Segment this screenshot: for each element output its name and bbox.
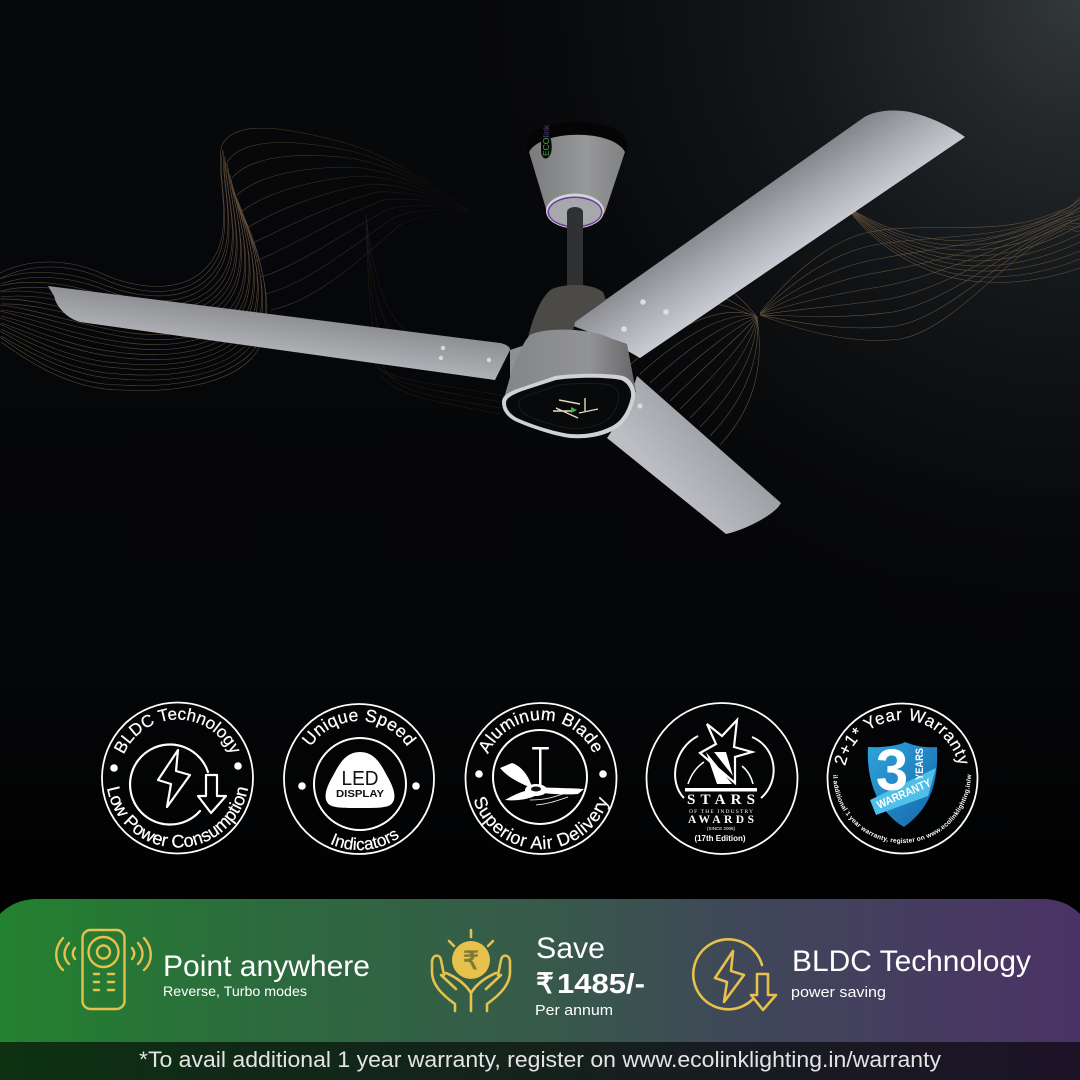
feature: save: ₹ — [536, 968, 554, 999]
warranty footer bar: *To avail additional 1 year warranty, register on www.ecolinklighting.in/warranty — [139, 1047, 941, 1072]
ceiling fan — [48, 110, 965, 534]
fan blade front — [607, 376, 781, 534]
fan blade left — [48, 286, 510, 380]
badge: aluminum blade: Superior Air Delivery — [474, 796, 610, 850]
feature: BLDC technology: BLDC Technology — [792, 945, 1031, 978]
badge: stars of the industry awards: AWARDS — [688, 814, 754, 826]
feature: point anywhere: Reverse, Turbo modes — [163, 983, 307, 999]
icon: mini fan — [500, 747, 584, 805]
badge: aluminum blade — [464, 702, 618, 855]
feature: save: Save — [536, 932, 605, 965]
icon: star trophy — [675, 720, 774, 798]
badge: stars of the industry awards: OF THE INDUSTRY — [689, 809, 753, 815]
icon: remote — [56, 930, 151, 1009]
icon: 3 years warranty shield: WARRANTY — [875, 777, 933, 812]
downrod — [567, 207, 583, 288]
icon: LED display: LED — [342, 768, 378, 790]
badge: LED display: Unique Speed — [302, 710, 417, 746]
badge: BLDC technology — [101, 702, 254, 854]
feature: save: 1485/- — [557, 968, 645, 999]
icon: LED display — [326, 752, 394, 808]
fan blade right — [570, 110, 965, 358]
air wave lines left — [0, 128, 505, 414]
warranty footer bar — [0, 1042, 1080, 1080]
ceiling canopy: ECOlink — [541, 124, 551, 156]
icon: 3 years warranty shield — [868, 738, 937, 827]
feature: BLDC technology: power saving — [791, 984, 886, 1001]
icon: bolt with arrow — [693, 939, 776, 1010]
ceiling canopy — [527, 122, 627, 228]
feature: BLDC technology — [693, 939, 1031, 1010]
badge: LED display — [283, 703, 435, 855]
icon: LED display: DISPLAY — [336, 788, 384, 800]
badge: stars of the industry awards: STARS — [687, 792, 755, 808]
badge: 2+1 year warranty: *To avail additional 1 year warranty, register on www.ecolinklighting.in/warranty — [833, 774, 972, 844]
badge: BLDC technology: BLDC Technology — [114, 708, 240, 754]
bottom feature panel — [0, 899, 1080, 1080]
feature: point anywhere: Point anywhere — [163, 950, 370, 983]
air wave lines right — [630, 198, 1080, 445]
icon: bolt with down arrow — [130, 745, 226, 825]
badge: 2+1 year warranty: 2+1* Year Warranty — [834, 708, 968, 766]
feature: save — [432, 930, 645, 1019]
icon: 3 years warranty shield: YEARS — [914, 748, 926, 780]
badge: BLDC technology: Low Power Consumption — [107, 786, 248, 848]
motor housing — [503, 285, 636, 420]
badge: aluminum blade: Aluminum Blade — [480, 710, 601, 754]
icon: rupee in hands: ₹ — [463, 947, 479, 975]
motor face — [502, 374, 635, 438]
feature: point anywhere — [56, 930, 370, 1009]
badge: 2+1 year warranty — [826, 702, 978, 854]
badge: stars of the industry awards — [646, 703, 798, 854]
logo mark — [553, 398, 598, 418]
badge: stars of the industry awards: (SINCE 2006) — [707, 826, 736, 831]
icon: rupee in hands — [432, 930, 510, 1011]
feature: save: Per annum — [535, 1002, 613, 1019]
icon: 3 years warranty shield: 3 — [876, 738, 908, 803]
badge: LED display: Indicators — [330, 830, 399, 850]
badge: stars of the industry awards: (17th Edition) — [694, 834, 746, 843]
